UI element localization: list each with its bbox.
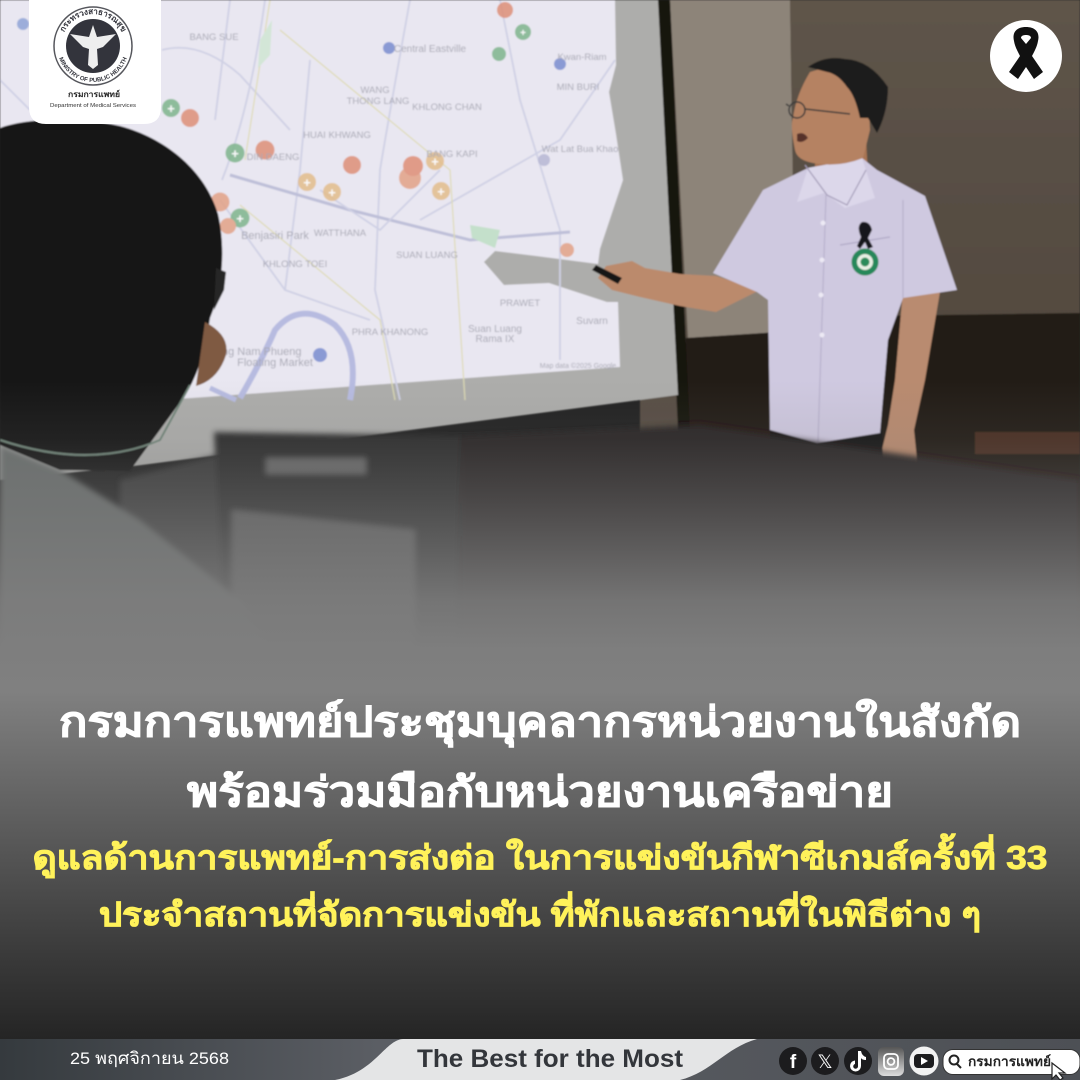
map pins: + xyxy=(520,28,526,39)
pointing arm xyxy=(598,261,760,312)
laser pointer xyxy=(592,265,622,284)
map pins: + xyxy=(431,154,439,169)
projection screen xyxy=(0,0,690,480)
map pins: + xyxy=(236,211,244,226)
ministry seal xyxy=(53,6,133,86)
map labels: BANG KAPI xyxy=(426,149,478,160)
glasses xyxy=(786,102,850,118)
photo: presenter with projected map xyxy=(0,0,1080,700)
map labels xyxy=(189,32,618,370)
date: 25 พฤศจิกายน 2568 xyxy=(70,1049,229,1068)
search text: กรมการแพทย์ xyxy=(968,1054,1051,1069)
map labels: WATTHANA xyxy=(314,228,367,239)
map labels: Floating Market xyxy=(237,357,313,369)
title line 1: กรมการแพทย์ประชุมบุคลากรหน่วยงานในสังกัด xyxy=(59,698,1021,748)
room wall xyxy=(640,0,1080,700)
icon: X xyxy=(811,1047,839,1075)
subtitle line 1: ดูแลด้านการแพทย์-การส่งต่อ ในการแข่งขันกีฬาซีเกมส์ครั้งที่ 33 xyxy=(32,833,1048,879)
trousers xyxy=(770,430,890,700)
subtitle line 2: ประจำสถานที่จัดการแข่งขัน ที่พักและสถานที่ในพิธีต่าง ๆ xyxy=(99,891,981,933)
map labels: DIN DAENG xyxy=(247,152,299,163)
map labels: Map data ©2025 Google xyxy=(540,362,616,370)
ministry seal: MINISTRY OF PUBLIC HEALTH xyxy=(59,56,127,82)
map labels: Bang Nam Phueng xyxy=(209,346,301,358)
neck xyxy=(815,120,868,180)
social icons xyxy=(779,1046,938,1076)
map pins: + xyxy=(437,184,445,199)
map labels: Suan Luang xyxy=(468,324,522,335)
search pill xyxy=(943,1050,1080,1080)
map labels: Rama IX xyxy=(476,334,515,345)
face xyxy=(792,66,870,165)
slogan: The Best for the Most xyxy=(417,1045,684,1073)
shirt xyxy=(713,158,957,443)
map labels: Suvarn xyxy=(576,316,608,327)
ministry seal: กระทรวงสาธารณสุข xyxy=(60,9,126,32)
map labels: Central Eastville xyxy=(394,44,467,55)
map pins: + xyxy=(328,185,336,200)
map labels: MIN BURI xyxy=(557,82,599,93)
map labels: Benjasiri Park xyxy=(241,230,309,242)
map pins: + xyxy=(303,175,311,190)
icon: magnifier xyxy=(950,1056,961,1068)
map pins xyxy=(17,2,574,362)
map labels: BANG SUE xyxy=(189,32,239,43)
map labels: KHLONG CHAN xyxy=(412,102,482,113)
icon: cursor xyxy=(1052,1063,1065,1080)
map labels: HUAI KHWANG xyxy=(303,130,371,141)
icon: facebook: f xyxy=(790,1052,797,1073)
map labels: PHRA KHANONG xyxy=(352,327,428,338)
map pins: + xyxy=(231,146,239,161)
black ribbon pin xyxy=(857,222,873,249)
icon: X: 𝕏 xyxy=(817,1052,833,1073)
icon: youtube xyxy=(910,1046,938,1076)
logo Thai name: กรมการแพทย์ xyxy=(68,89,120,99)
hospital badge xyxy=(852,248,878,276)
footer bar xyxy=(0,1039,1080,1080)
headline xyxy=(32,698,1048,933)
icon: facebook xyxy=(779,1047,807,1075)
icon: tiktok xyxy=(844,1047,872,1075)
projected map xyxy=(0,0,623,410)
logo English name: Department of Medical Services xyxy=(50,103,136,109)
right arm and hand xyxy=(880,290,940,484)
title line 2: พร้อมร่วมมือกับหน่วยงานเครือข่าย xyxy=(187,769,893,815)
presenter xyxy=(592,58,957,700)
map labels: SUAN LUANG xyxy=(396,250,458,261)
map labels: Wat Lat Bua Khao xyxy=(542,144,618,155)
icon: instagram xyxy=(878,1047,904,1076)
foreground: audience head and shoulders xyxy=(0,120,300,700)
map labels: KHLONG TOEI xyxy=(263,259,327,270)
foreground: laptop and desk xyxy=(120,425,1080,700)
logo card: Department of Medical Services xyxy=(29,0,161,124)
map labels: WANG xyxy=(360,85,390,96)
map labels: PRAWET xyxy=(500,298,540,309)
icon: mourning ribbon badge xyxy=(990,20,1062,92)
map labels: Kwan-Riam xyxy=(557,52,607,63)
hair xyxy=(808,58,888,133)
map labels: THONG LANG xyxy=(347,96,409,107)
map pins: + xyxy=(167,101,175,116)
footer white swoosh xyxy=(335,1039,757,1080)
